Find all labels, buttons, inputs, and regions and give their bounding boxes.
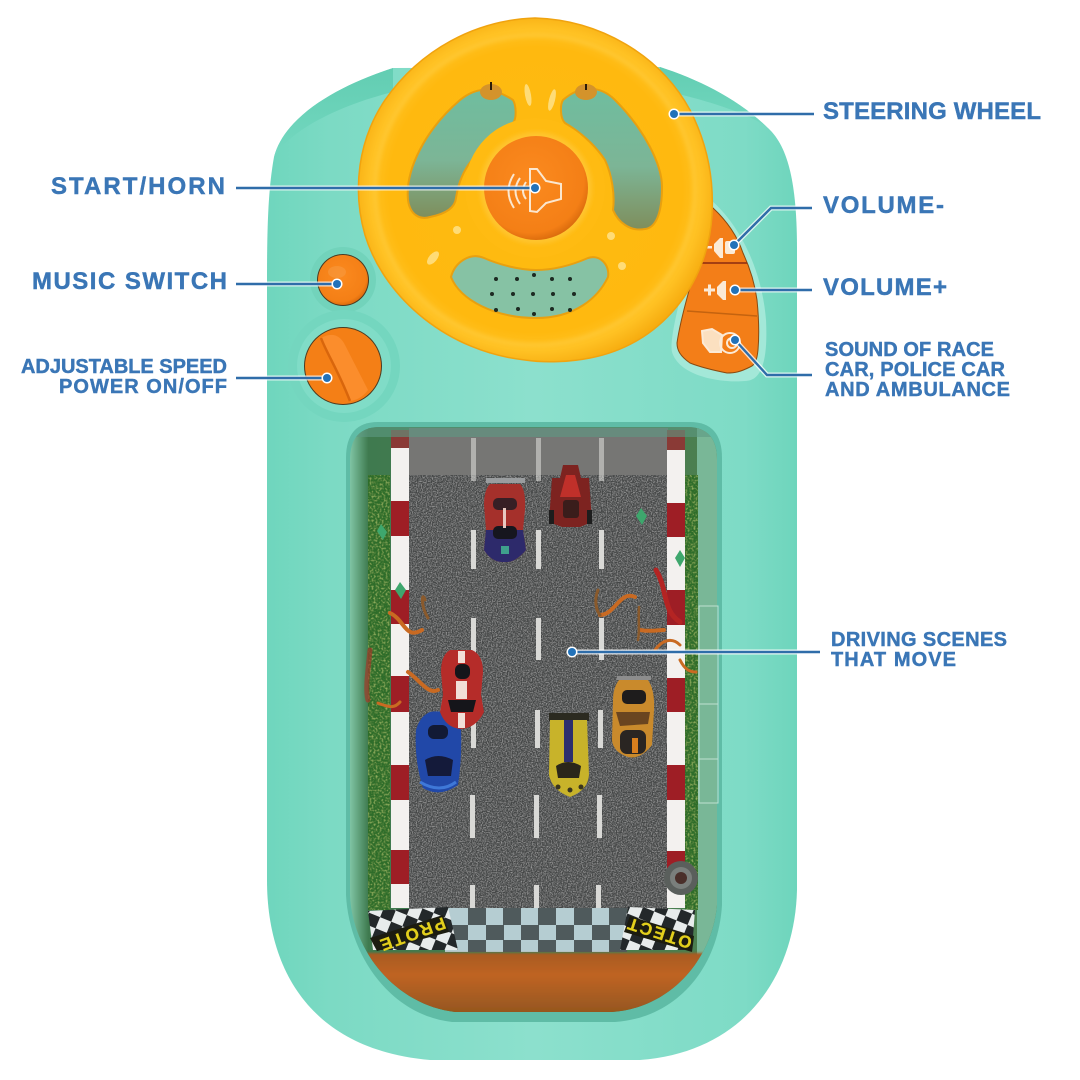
callout: steering wheel: STEERING WHEEL: [823, 98, 1041, 125]
callout: volume minus: VOLUME-: [823, 192, 944, 219]
callout: vehicle sounds: AND AMBULANCE: [825, 379, 1010, 401]
toy body: [267, 67, 797, 1060]
side window panels: [699, 606, 718, 803]
start line checks: [445, 908, 627, 952]
callout: music switch: MUSIC SWITCH: [32, 268, 227, 295]
callout: vehicle sounds: SOUND OF RACE: [825, 339, 994, 361]
callout: driving scenes: THAT MOVE: [831, 649, 956, 671]
icon: volume minus: [706, 238, 735, 258]
car: red and navy: [484, 478, 526, 562]
grass strips: [368, 475, 698, 910]
screen rim: [346, 422, 722, 1022]
callout: adjustable speed: POWER ON/OFF: [59, 376, 227, 398]
horn button: [484, 136, 588, 240]
callout: volume plus: [730, 274, 947, 301]
callout: start/horn: START/HORN: [51, 173, 225, 200]
callout: music switch: [32, 268, 342, 295]
car: orange and black: [612, 676, 654, 758]
volume and sound buttons: [672, 200, 766, 381]
left checkered banner: PROTE: [378, 913, 448, 954]
callout: adjustable speed: [21, 356, 332, 398]
screen scene: [350, 427, 717, 1017]
screw posts: [480, 82, 597, 100]
speed and power dial: [288, 310, 400, 422]
callout: vehicle sounds: CAR, POLICE CAR: [825, 359, 1006, 381]
hub: [465, 118, 605, 258]
asphalt road: [409, 475, 668, 910]
callout: start/horn: [51, 173, 540, 200]
orange band: [350, 953, 717, 1015]
wheel highlights: [425, 84, 626, 270]
callout: driving scenes: DRIVING SCENES: [831, 629, 1007, 651]
blurred top glass shade: [350, 427, 717, 437]
blurred top of road: [409, 428, 668, 475]
icon: race car sound: [702, 329, 740, 353]
speaker grille dots: [490, 273, 576, 316]
holes seen through wheel: [408, 89, 662, 318]
rim sheen: [375, 35, 695, 345]
steering wheel: [358, 18, 712, 362]
callout: adjustable speed: ADJUSTABLE SPEED: [21, 356, 227, 378]
icon: horn speaker: [508, 169, 561, 212]
callout: steering wheel: [668, 98, 1041, 125]
left checkered banner: [368, 907, 458, 954]
right checkered banner: OTECT: [625, 914, 694, 952]
callout: volume plus: VOLUME+: [823, 274, 947, 301]
tyre: [664, 861, 698, 895]
green confetti: [377, 508, 685, 599]
game screen: [346, 422, 722, 1022]
music switch button: [310, 247, 376, 313]
right kerb: [667, 430, 685, 908]
car: yellow: [549, 713, 589, 797]
callout: vehicle sounds: [730, 334, 1010, 401]
callout: volume minus: [728, 192, 944, 250]
callout: driving scenes: [566, 629, 1007, 671]
car: blue: [416, 711, 461, 792]
wheel ring and spokes: [358, 18, 712, 362]
car: red with white stripes: [440, 650, 484, 729]
icon: volume plus: [704, 281, 726, 300]
left kerb: [391, 430, 409, 908]
confetti ribbons: [367, 570, 696, 707]
car: dark red racer: [549, 465, 592, 527]
lane markings: [470, 438, 604, 908]
